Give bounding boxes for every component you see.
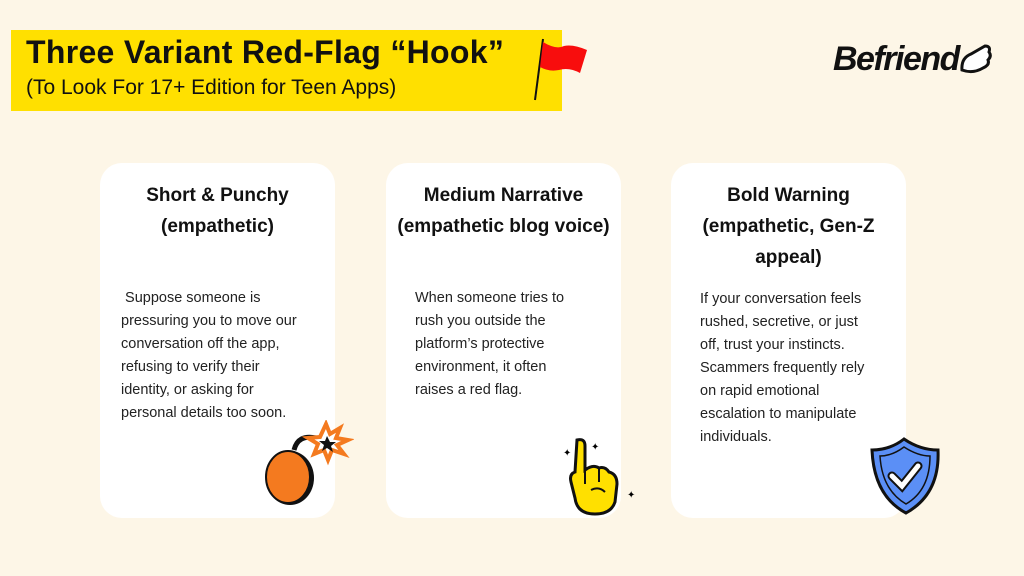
panel: bold warning [671,163,906,518]
heading [146,185,289,237]
icon: red flag [534,38,587,100]
title banner [11,30,562,111]
heading: Short & Punchy [146,185,289,206]
icon: pointing hand: ✦ [563,448,571,459]
icon: pointing hand: ✦ [627,490,635,501]
icon: bomb [265,420,354,505]
panel: short & punchy [100,163,335,518]
title: Three Variant Red-Flag “Hook” [26,34,504,70]
icon: shield check [870,437,940,515]
icon: pointing hand: ✦ [591,442,599,453]
heading: Bold Warning [727,185,850,206]
heading: (empathetic blog voice) [397,216,610,237]
icon: pointing hand [563,438,635,516]
heading: (empathetic, Gen-Z [702,216,875,237]
body text: When someone tries to rush you outside the platform’s protective environment, it often raises a red flag. [415,290,564,398]
subtitle: (To Look For 17+ Edition for Teen Apps) [26,76,396,99]
panel: medium narrative [386,163,621,518]
heading: Medium Narrative [424,185,583,206]
body text: Suppose someone is pressuring you to move our conversation off the app, refusing to verify their identity, or asking for personal details too soon. [121,290,297,421]
body text: If your conversation feels rushed, secretive, or just off, trust your instincts. Scammers frequently rely on rapid emotional escalation to manipulate individuals. [700,291,864,445]
heading: appeal) [755,247,822,268]
heading [397,185,610,237]
logo: Befriend: Befriend [833,40,959,78]
heading [702,185,875,268]
heading: (empathetic) [161,216,274,237]
